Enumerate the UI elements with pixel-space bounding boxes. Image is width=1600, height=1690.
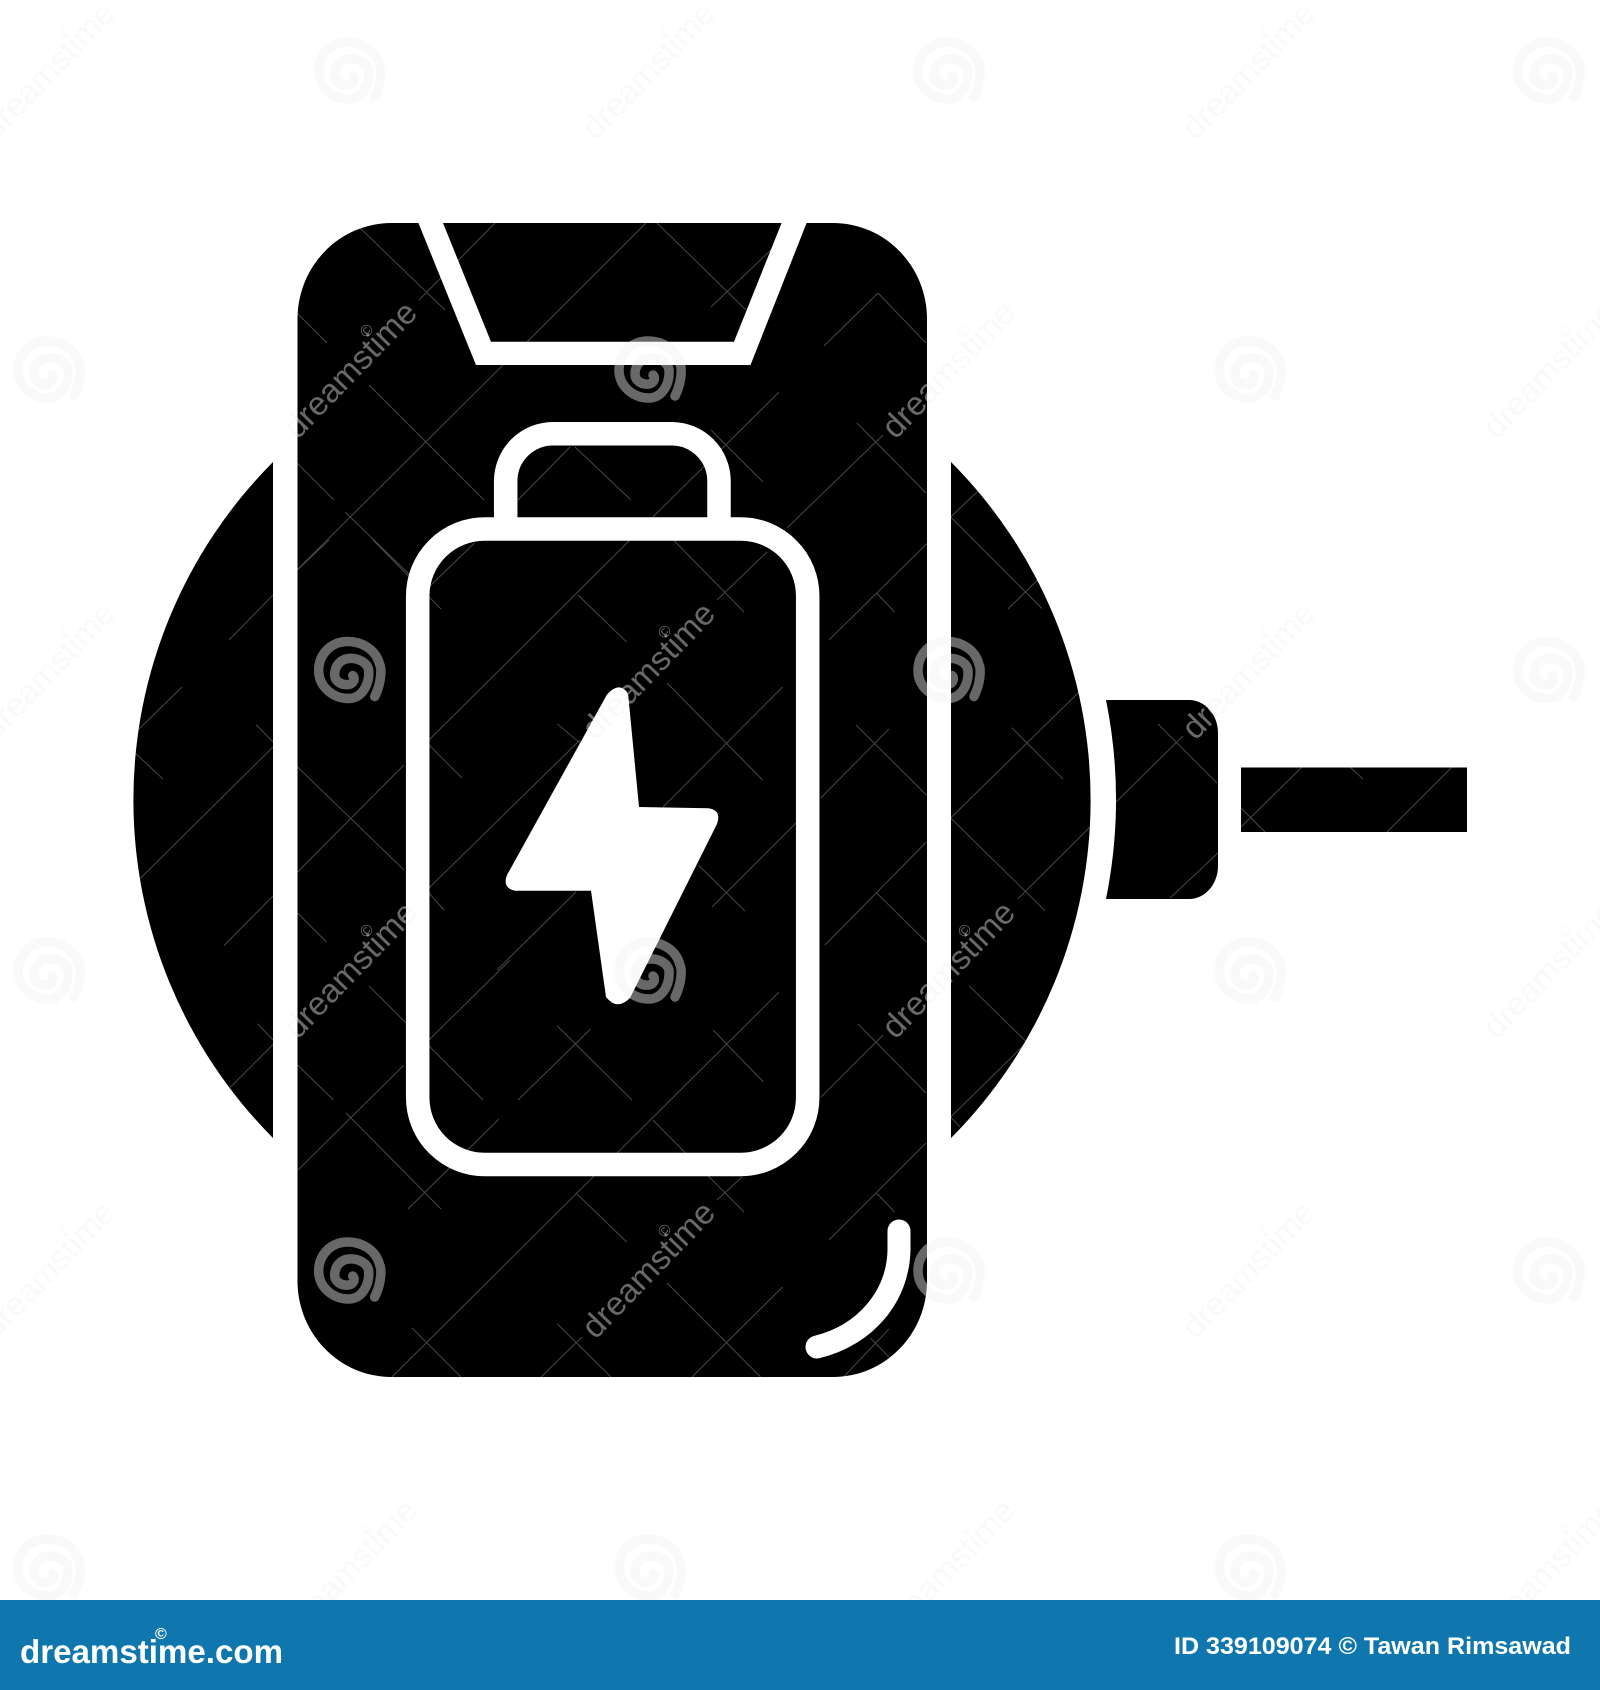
watermark words: © bbox=[55, 1221, 76, 1241]
watermark words: © bbox=[357, 921, 378, 941]
battery body bbox=[418, 529, 808, 1164]
watermark words: © bbox=[55, 22, 76, 42]
watermark words: © bbox=[1255, 22, 1276, 42]
phone notch bbox=[418, 222, 807, 365]
footer credit: ID 339109074 © Tawan Rimsawad bbox=[1174, 1633, 1571, 1660]
icon: wireless charger with phone bbox=[133, 222, 1467, 1377]
watermark words: dreamstime bbox=[574, 594, 722, 746]
charging pad: left segment bbox=[133, 462, 273, 1138]
watermark words: © bbox=[1255, 1221, 1276, 1241]
watermark words: © bbox=[655, 22, 676, 42]
watermark words: © bbox=[655, 622, 676, 642]
cable bbox=[1241, 768, 1467, 832]
footer bar bbox=[0, 1600, 1600, 1690]
watermark words: © bbox=[1556, 921, 1577, 941]
watermark words: © bbox=[357, 321, 378, 341]
phone body bbox=[298, 223, 927, 1377]
watermark words: © bbox=[1556, 321, 1577, 341]
footer logo: dreamstime.com bbox=[20, 1633, 283, 1670]
screen glare bbox=[817, 1231, 899, 1347]
watermark words: © bbox=[955, 321, 976, 341]
watermark words: © bbox=[955, 1519, 976, 1539]
watermark words: © bbox=[1556, 1519, 1577, 1539]
watermark words: © bbox=[55, 622, 76, 642]
watermark words: © bbox=[955, 921, 976, 941]
watermark words: dreamstime bbox=[276, 1491, 424, 1643]
watermark words: © bbox=[655, 1221, 676, 1241]
watermark words: dreamstime bbox=[874, 1491, 1022, 1643]
charging pad: right segment bbox=[951, 462, 1091, 1138]
watermark words: dreamstime bbox=[874, 293, 1022, 445]
watermark hairlines bbox=[135, 223, 1452, 1377]
watermark words: dreamstime bbox=[276, 893, 424, 1045]
watermark words: dreamstime bbox=[574, 0, 722, 146]
lightning bolt bbox=[506, 687, 718, 1004]
watermark words: dreamstime bbox=[874, 893, 1022, 1045]
watermark words: dreamstime bbox=[574, 1193, 722, 1345]
watermark words: dreamstime bbox=[1174, 594, 1322, 746]
cable connector bbox=[1106, 700, 1218, 899]
watermark words: dreamstime bbox=[1174, 0, 1322, 146]
watermark words: dreamstime bbox=[1174, 1193, 1322, 1345]
watermark words: © bbox=[1255, 622, 1276, 642]
watermark words: © bbox=[357, 1519, 378, 1539]
footer logo: © bbox=[155, 1626, 167, 1643]
battery cap bbox=[506, 434, 719, 529]
watermark words: dreamstime bbox=[276, 293, 424, 445]
